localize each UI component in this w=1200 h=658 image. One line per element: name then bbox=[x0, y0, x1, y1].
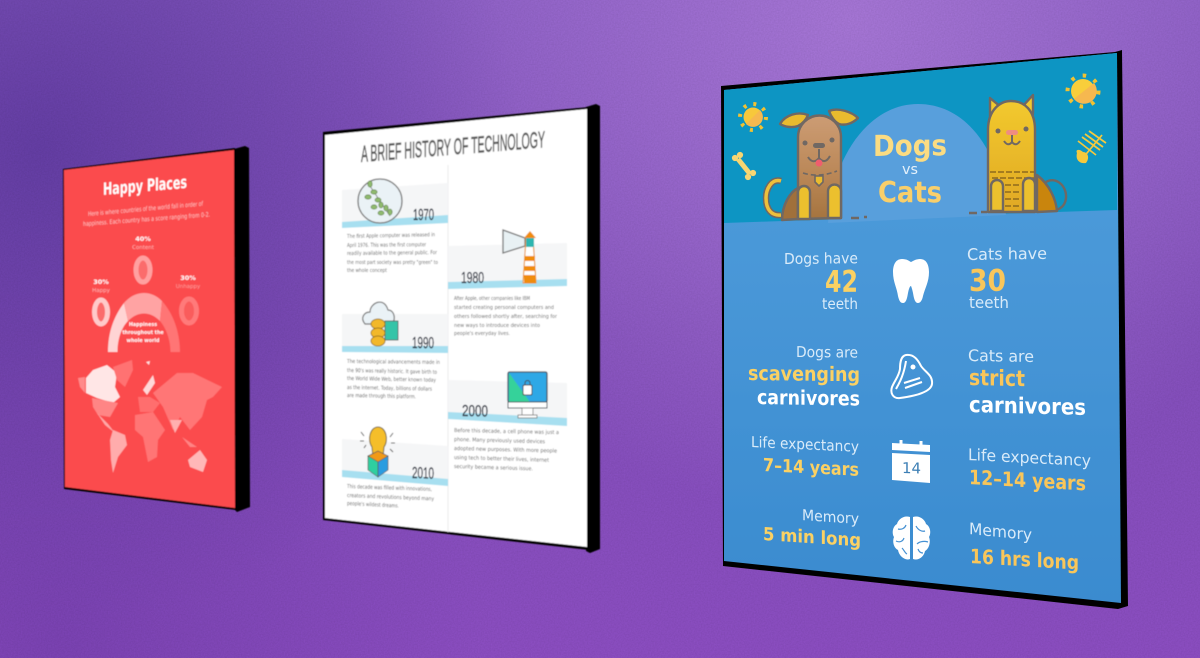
row: diet, cats: strict bbox=[969, 366, 1025, 392]
header background bbox=[724, 53, 1117, 223]
row: diet, cats bbox=[968, 346, 1086, 421]
icon: left sun bbox=[740, 104, 766, 130]
title: Dogs vs Cats: vs bbox=[902, 162, 918, 178]
row: memory, cats: 16 hrs long bbox=[970, 544, 1079, 575]
gauge caption: Happiness bbox=[129, 322, 157, 328]
entry: 1980: After Apple, other companies like IBM bbox=[454, 296, 530, 302]
title: Dogs vs Cats: Dogs bbox=[873, 128, 947, 163]
entry: 1980: others followed shortly after, searching for bbox=[454, 314, 558, 320]
row: memory, dogs bbox=[763, 506, 861, 551]
row: diet, dogs: carnivores bbox=[757, 385, 860, 411]
entry: 1990: The technological advancements made in bbox=[346, 359, 440, 366]
entry: 1990: the 90's was really historic. It gave birth to bbox=[347, 368, 437, 376]
stat: Happy: 30% bbox=[93, 278, 109, 286]
panel: Dogs vs Cats bbox=[721, 50, 1128, 609]
title: Dogs vs Cats bbox=[873, 128, 947, 209]
entry: 1970: readily available to the general public. For bbox=[347, 250, 438, 257]
entry: 1970: The first Apple computer was released in bbox=[346, 232, 435, 240]
entry: 1980: new ways to introduce devices into bbox=[454, 323, 540, 329]
entry: 2000: phone. Many previously used devices bbox=[454, 437, 545, 445]
entry: 2010: This decade was filled with innovations, bbox=[346, 484, 432, 493]
entry: 2010: 2010 bbox=[412, 465, 434, 483]
row: teeth, dogs: Dogs have bbox=[784, 249, 858, 268]
entry: 1970 bbox=[342, 179, 448, 274]
icon: fish bone bbox=[1077, 131, 1106, 163]
entry: 1980: people's everyday lives. bbox=[454, 331, 510, 337]
stat: Unhappy bbox=[176, 274, 201, 323]
title: Dogs vs Cats: Cats bbox=[878, 175, 942, 209]
entry: 1990 bbox=[342, 302, 448, 400]
row: life expectancy, dogs: 7–14 years bbox=[763, 455, 859, 481]
gauge caption: whole world bbox=[127, 338, 160, 344]
row: life expectancy, cats bbox=[968, 445, 1091, 495]
row: teeth, cats: Cats have bbox=[967, 244, 1047, 264]
entry: 2000: security became a serious issue. bbox=[454, 464, 533, 472]
gauge: happiness arc bbox=[108, 293, 180, 352]
icon: right sun bbox=[1068, 76, 1098, 106]
illustration: dog bbox=[766, 110, 867, 220]
row: teeth, dogs: teeth bbox=[822, 295, 858, 313]
stat: Content: Content bbox=[132, 245, 155, 251]
icon: tooth bbox=[893, 259, 929, 303]
row: teeth, cats bbox=[967, 244, 1047, 312]
row: teeth, dogs: 42 bbox=[825, 265, 858, 300]
hill behind title bbox=[828, 104, 1006, 223]
row: diet, cats: Cats are bbox=[968, 346, 1034, 366]
stat: Content bbox=[132, 235, 155, 282]
row: teeth, cats: teeth bbox=[969, 293, 1009, 312]
entry: 1990: 1990 bbox=[412, 335, 434, 352]
entry: 1980 bbox=[448, 230, 567, 337]
row: memory, cats: Memory bbox=[969, 519, 1032, 544]
icon: brain bbox=[893, 517, 930, 560]
icon: bone bbox=[732, 152, 756, 180]
row: memory, dogs: Memory bbox=[802, 506, 859, 528]
panel: A Brief History of Technology: A BRIEF HISTORY OF TECHNOLOGY bbox=[361, 126, 545, 167]
entry: 1980: started creating personal computers and bbox=[454, 305, 554, 311]
row: memory, dogs: 5 min long bbox=[763, 524, 861, 551]
stat: Unhappy: Unhappy bbox=[176, 284, 201, 290]
stat: Content: 40% bbox=[135, 235, 151, 243]
row: diet, dogs bbox=[748, 343, 860, 411]
stat: Happy bbox=[92, 278, 111, 324]
row: diet, dogs: scavenging bbox=[748, 361, 860, 386]
gauge caption: throughout the bbox=[122, 330, 164, 336]
row: memory, cats bbox=[969, 519, 1079, 575]
row: diet, dogs: Dogs are bbox=[796, 343, 858, 362]
intro text: happiness. Each country has a score ranging from 0-2. bbox=[83, 211, 210, 228]
entry: 2010 bbox=[342, 427, 448, 510]
intro text: Here is where countries of the world fall in order of bbox=[88, 201, 204, 218]
entry: 1970: the most part society was pretty "green" to bbox=[347, 260, 438, 266]
entry: 2000: adopted new purposes. With more people bbox=[454, 446, 558, 455]
row: life expectancy, cats: 12–14 years bbox=[969, 465, 1086, 495]
entry: 2000: using tech to better their lives, internet bbox=[454, 455, 549, 464]
intro text bbox=[83, 201, 210, 228]
row: life expectancy, cats: Life expectancy bbox=[968, 445, 1091, 470]
stat: Unhappy: 30% bbox=[180, 274, 196, 282]
world map bbox=[78, 360, 222, 473]
stat: Happy: Happy bbox=[92, 288, 111, 294]
gauge caption bbox=[122, 322, 164, 344]
row: teeth, dogs bbox=[784, 249, 858, 313]
timeline spine bbox=[447, 165, 449, 532]
entry: 1990: are made through this platform. bbox=[347, 393, 416, 400]
panel: Happy Places bbox=[63, 146, 250, 512]
row: life expectancy, dogs bbox=[751, 433, 859, 481]
icon: calendar bbox=[892, 440, 930, 483]
illustration: cat bbox=[969, 95, 1066, 213]
icon: calendar: 14 bbox=[902, 459, 921, 478]
entry: 2010: people's wildest dreams. bbox=[347, 501, 399, 510]
row: teeth, cats: 30 bbox=[969, 264, 1006, 299]
entry: 2000: 2000 bbox=[462, 403, 488, 421]
entry: 2000 bbox=[448, 372, 567, 472]
row: life expectancy, dogs: Life expectancy bbox=[751, 433, 859, 456]
entry: 1990: the World Wide Web, better known today bbox=[347, 376, 437, 384]
panel: A Brief History of Technology bbox=[323, 104, 600, 553]
entry: 2000: Before this decade, a cell phone was just a bbox=[454, 428, 559, 436]
entry: 1990: as the internet. Today, billions of dollars bbox=[347, 385, 432, 393]
heading: Happy Places: Happy Places bbox=[103, 173, 187, 200]
entry: 1970: April 1976. This was the first computer bbox=[347, 242, 427, 249]
entry: 2010: creators and revolutions beyond many bbox=[347, 493, 435, 503]
row: diet, cats: carnivores bbox=[969, 393, 1086, 421]
entry: 1980: 1980 bbox=[461, 270, 484, 287]
entry: 1970: 1970 bbox=[413, 207, 434, 224]
icon: meat bbox=[891, 355, 932, 398]
entry: 1970: the whole concept bbox=[347, 268, 387, 274]
